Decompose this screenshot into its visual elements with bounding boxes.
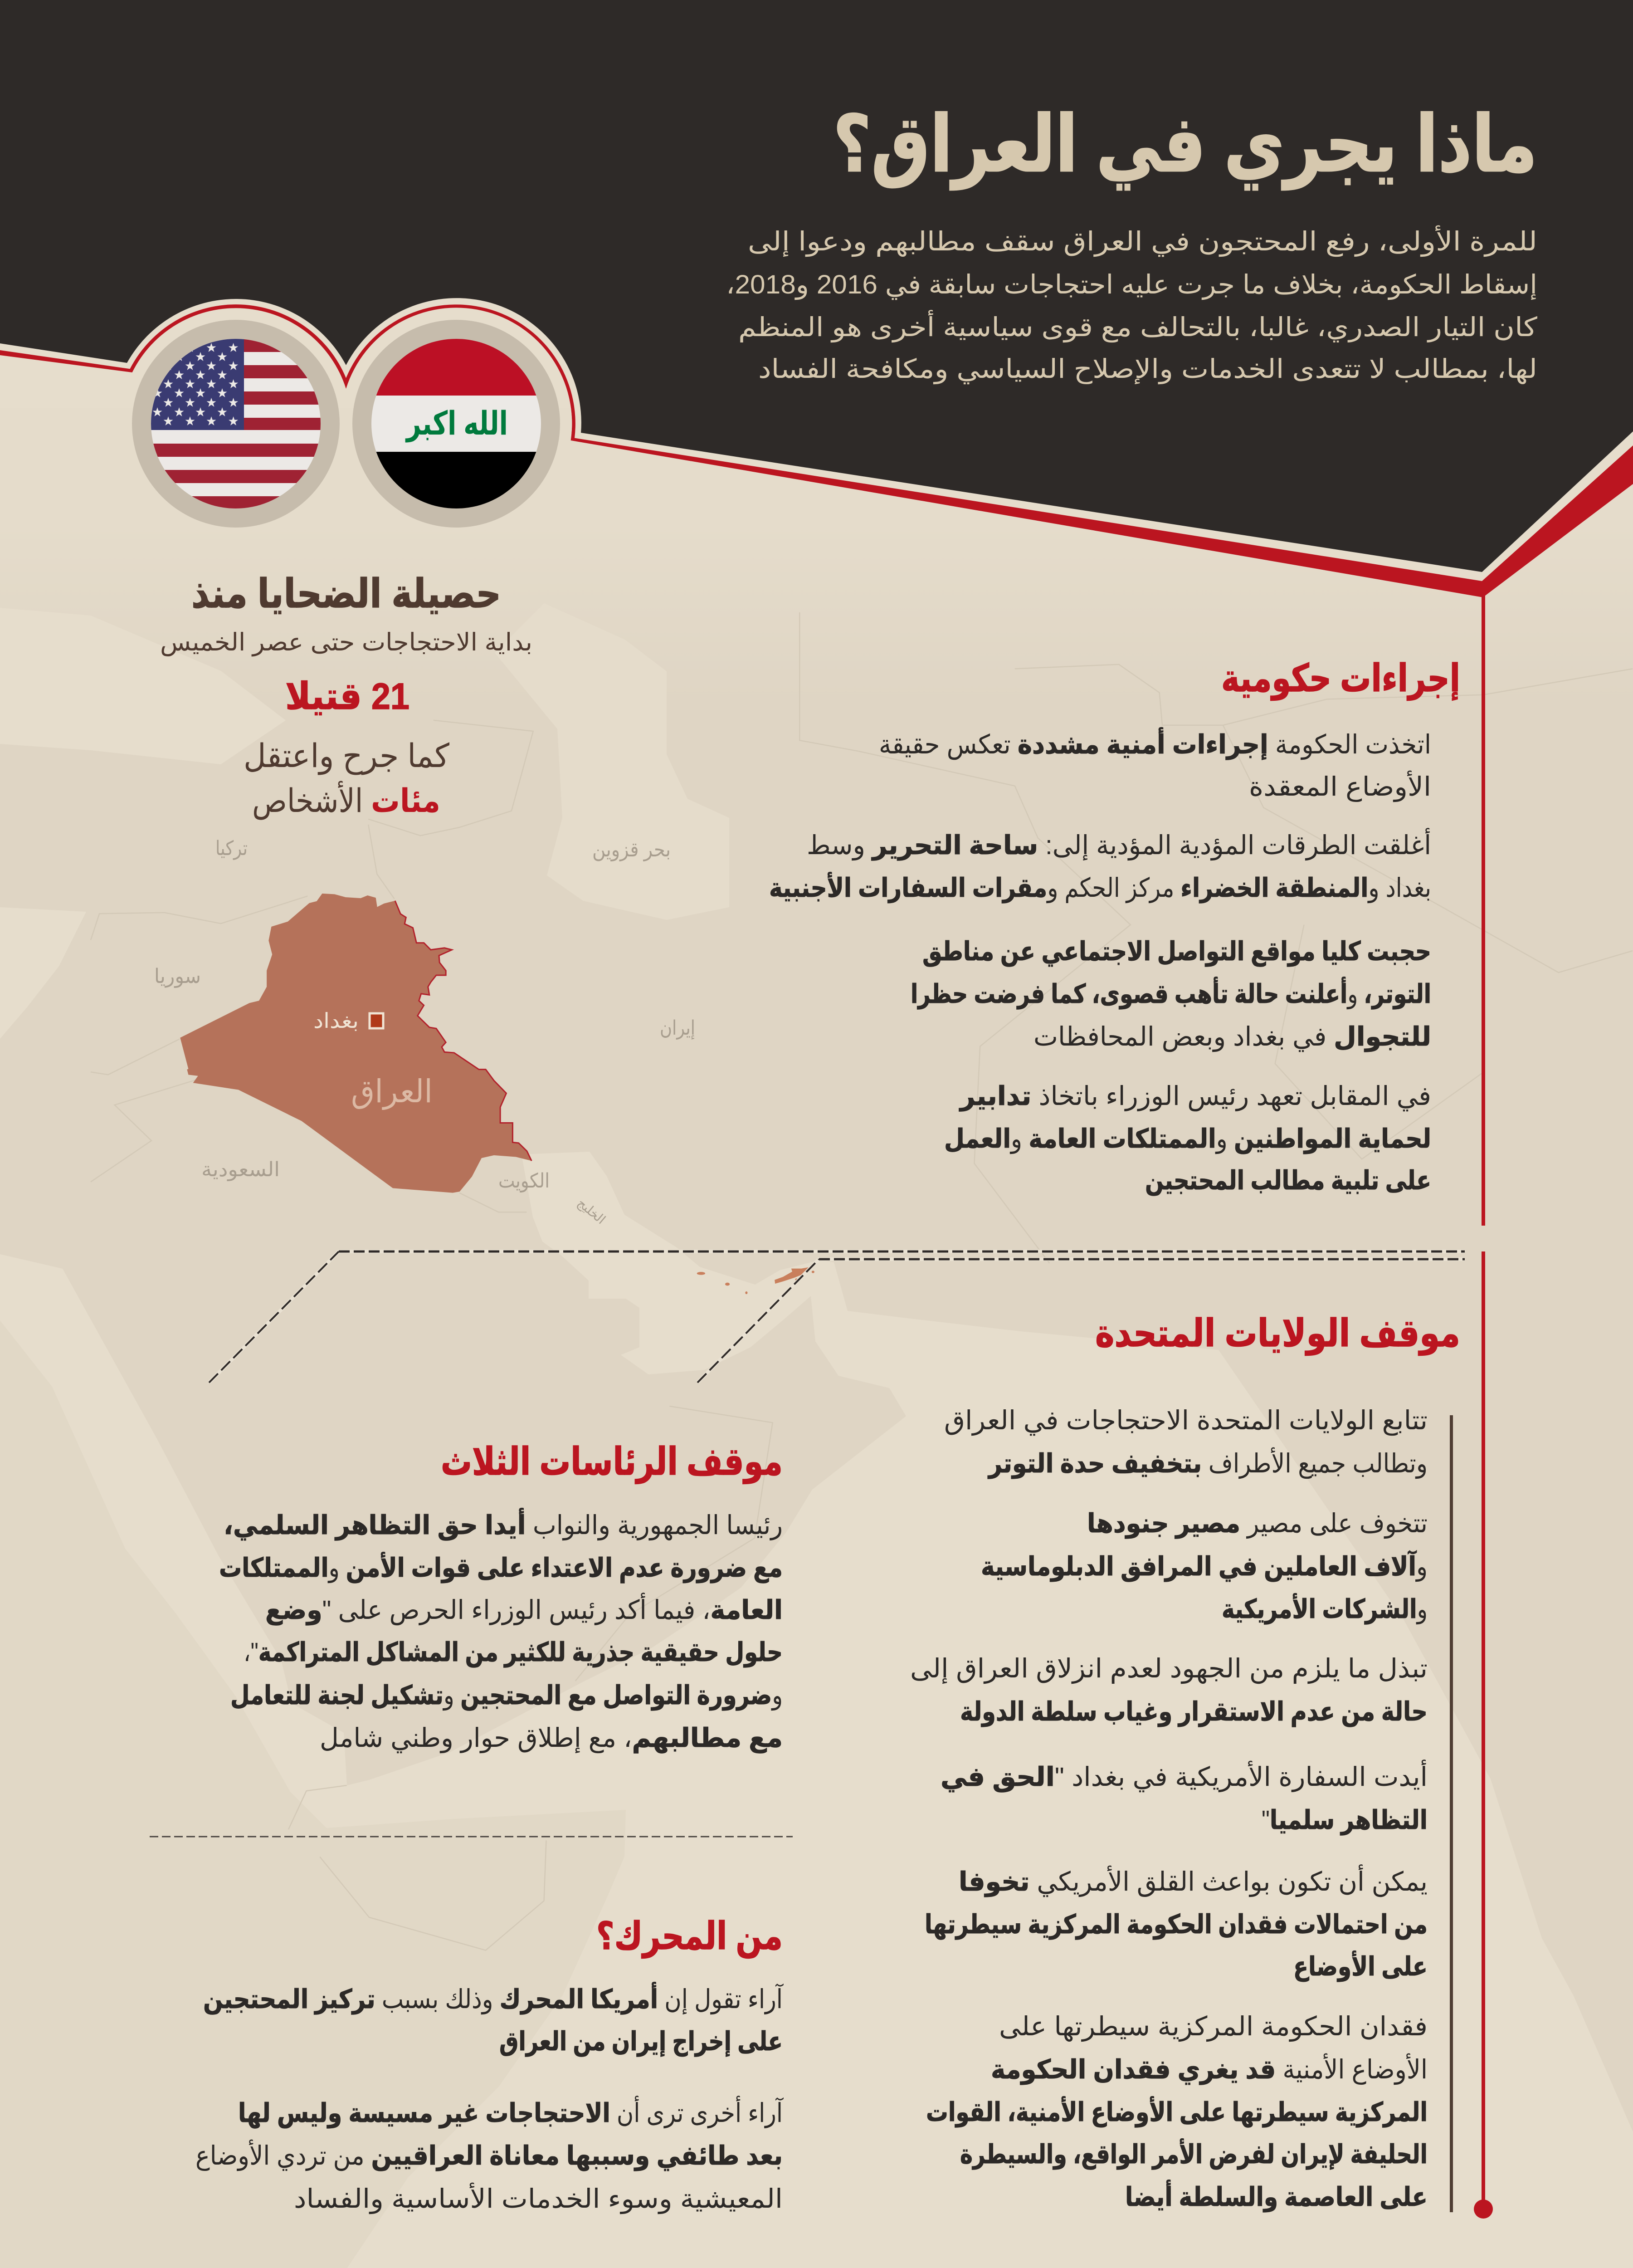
background map	[90, 408, 1633, 1951]
flag: Iraq	[352, 320, 560, 528]
panel: United States position: تتابع الولايات المتحدة الاحتجاجات في العراق	[944, 1406, 1428, 1436]
panel: who is behind it: على إخراج إيران من العراق	[499, 2027, 783, 2057]
caspian sea	[495, 603, 729, 920]
panel: government measures: أغلقت الطرقات المؤدية المؤدية إلى: ساحة التحرير وسط	[807, 828, 1431, 861]
panel: who is behind it: المعيشية وسوء الخدمات الأساسية والفساد	[294, 2182, 783, 2214]
flag: Iraq: الله اكبر	[405, 406, 508, 443]
casualties block	[160, 571, 532, 820]
panel: United States position: أيدت السفارة الأمريكية في بغداد "الحق في	[941, 1760, 1428, 1793]
intro paragraph: للمرة الأولى، رفع المحتجون في العراق سقف مطالبهم ودعوا إلى	[748, 225, 1537, 257]
panel: government measures: لحماية المواطنين والممتلكات العامة والعمل	[944, 1124, 1431, 1154]
casualties block: حصيلة الضحايا منذ	[191, 571, 501, 616]
panel: three presidencies: موقف الرئاسات الثلاث	[441, 1440, 783, 1484]
intro paragraph	[726, 225, 1537, 385]
panel: three presidencies: وضرورة التواصل مع المحتجين وتشكيل لجنة للتعامل	[230, 1681, 783, 1711]
map labels: إيران	[660, 1017, 695, 1040]
intro paragraph: إسقاط الحكومة، بخلاف ما جرت عليه احتجاجات سابقة في 2016 و2018،	[726, 270, 1537, 300]
panel: United States position: تبذل ما يلزم من الجهود لعدم انزلاق العراق إلى	[910, 1654, 1428, 1684]
panel: government measures: اتخذت الحكومة إجراءات أمنية مشددة تعكس حقيقة	[879, 727, 1431, 760]
map labels: السعودية	[201, 1158, 280, 1181]
casualties block: مئات الأشخاص	[252, 781, 440, 820]
panel: three presidencies: العامة، فيما أكد رئيس الوزراء الحرص على "وضع	[265, 1593, 783, 1626]
map: Iranian islands	[697, 1267, 814, 1294]
panel: government measures: بغداد والمنطقة الخضراء مركز الحكم ومقرات السفارات الأجنبية	[769, 872, 1431, 904]
panel: who is behind it	[195, 1915, 784, 2214]
panel: three presidencies: مع ضرورة عدم الاعتداء على قوات الأمن والممتلكات	[219, 1552, 783, 1584]
panel: United States position: وتطالب جميع الأطراف بتخفيف حدة التوتر	[987, 1447, 1428, 1479]
panel: three presidencies: مع مطالبهم، مع إطلاق حوار وطني شامل	[320, 1723, 783, 1754]
panel: United States position: على الأوضاع	[1293, 1950, 1428, 1982]
map labels: بحر قزوين	[592, 839, 671, 861]
map labels: تركيا	[215, 837, 248, 860]
casualties block: 21 قتيلا	[285, 676, 409, 717]
header dark panel	[0, 0, 1633, 635]
panel: who is behind it: آراء تقول إن أمريكا المحرك وذلك بسبب تركيز المحتجين	[203, 1982, 784, 2015]
intro paragraph: كان التيار الصدري، غالبا، بالتحالف مع قوى سياسية أخرى هو المنظم	[738, 310, 1537, 343]
panel: government measures: حجبت كليا مواقع التواصل الاجتماعي عن مناطق	[922, 937, 1431, 967]
panel: United States position: من احتمالات فقدان الحكومة المركزية سيطرتها	[925, 1910, 1428, 1940]
map labels: الخليج	[575, 1196, 608, 1227]
panel: government measures: على تلبية مطالب المحتجين	[1145, 1166, 1431, 1196]
panel: United States position: موقف الولايات المتحدة	[1095, 1312, 1460, 1356]
panel: who is behind it: من المحرك؟	[596, 1915, 783, 1959]
flag: United States	[132, 320, 340, 528]
panel: United States position: وآلاف العاملين في المرافق الدبلوماسية	[981, 1550, 1428, 1582]
panel: United States position	[910, 1312, 1460, 2213]
map labels: الكويت	[498, 1170, 550, 1193]
map: Iraq: العراق	[351, 1074, 433, 1110]
panel: United States position: التظاهر سلميا"	[1262, 1805, 1428, 1836]
red vertical timeline	[1474, 595, 1493, 2219]
panel: government measures: إجراءات حكومية	[1221, 657, 1460, 701]
map labels: سوريا	[154, 965, 201, 988]
panel: three presidencies	[219, 1440, 783, 1754]
panel: United States position: الأوضاع الأمنية قد يغري فقدان الحكومة	[991, 2053, 1428, 2085]
panel: who is behind it: بعد طائفي وسببها معاناة العراقيين من تردي الأوضاع	[195, 2139, 783, 2171]
panel: United States position: والشركات الأمريكية	[1222, 1593, 1428, 1625]
panel: government measures: للتجوال في بغداد وبعض المحافظات	[1033, 1022, 1431, 1052]
casualties block: كما جرح واعتقل	[244, 738, 450, 775]
panel: three presidencies: حلول حقيقية جذرية للكثير من المشاكل المتراكمة"،	[244, 1637, 783, 1668]
panel: three presidencies: رئيسا الجمهورية والنواب أيدا حق التظاهر السلمي،	[224, 1508, 783, 1541]
map: Iraq: بغداد	[313, 1009, 359, 1032]
panel: government measures: الأوضاع المعقدة	[1249, 770, 1431, 802]
map: Iraq	[180, 894, 531, 1193]
panel: government measures: التوتر، وأعلنت حالة تأهب قصوى، كما فرضت حظرا	[911, 977, 1431, 1010]
panel: United States position: يمكن أن تكون بواعث القلق الأمريكي تخوفا	[959, 1864, 1428, 1897]
panel: United States position: على العاصمة والسلطة أيضا	[1125, 2180, 1428, 2213]
map labels	[154, 837, 695, 1227]
dashed connector lines	[209, 1251, 1465, 1383]
casualties block: بداية الاحتجاجات حتى عصر الخميس	[160, 629, 532, 656]
panel: United States position: حالة من عدم الاستقرار وغياب سلطة الدولة	[960, 1697, 1428, 1727]
panel: government measures	[769, 657, 1460, 1196]
panel: who is behind it: آراء أخرى ترى أن الاحتجاجات غير مسيسة وليس لها	[238, 2096, 784, 2129]
panel: United States position: المركزية سيطرتها على الأوضاع الأمنية، القوات	[926, 2096, 1428, 2128]
panel: United States position: الحليفة لإيران لفرض الأمر الواقع، والسيطرة	[960, 2138, 1428, 2170]
panel: government measures: في المقابل تعهد رئيس الوزراء باتخاذ تدابير	[959, 1081, 1431, 1112]
panel: United States position: تتخوف على مصير مصير جنودها	[1087, 1509, 1428, 1539]
panel: United States position: فقدان الحكومة المركزية سيطرتها على	[999, 2012, 1428, 2042]
intro paragraph: لها، بمطالب لا تتعدى الخدمات والإصلاح السياسي ومكافحة الفساد	[758, 354, 1537, 385]
